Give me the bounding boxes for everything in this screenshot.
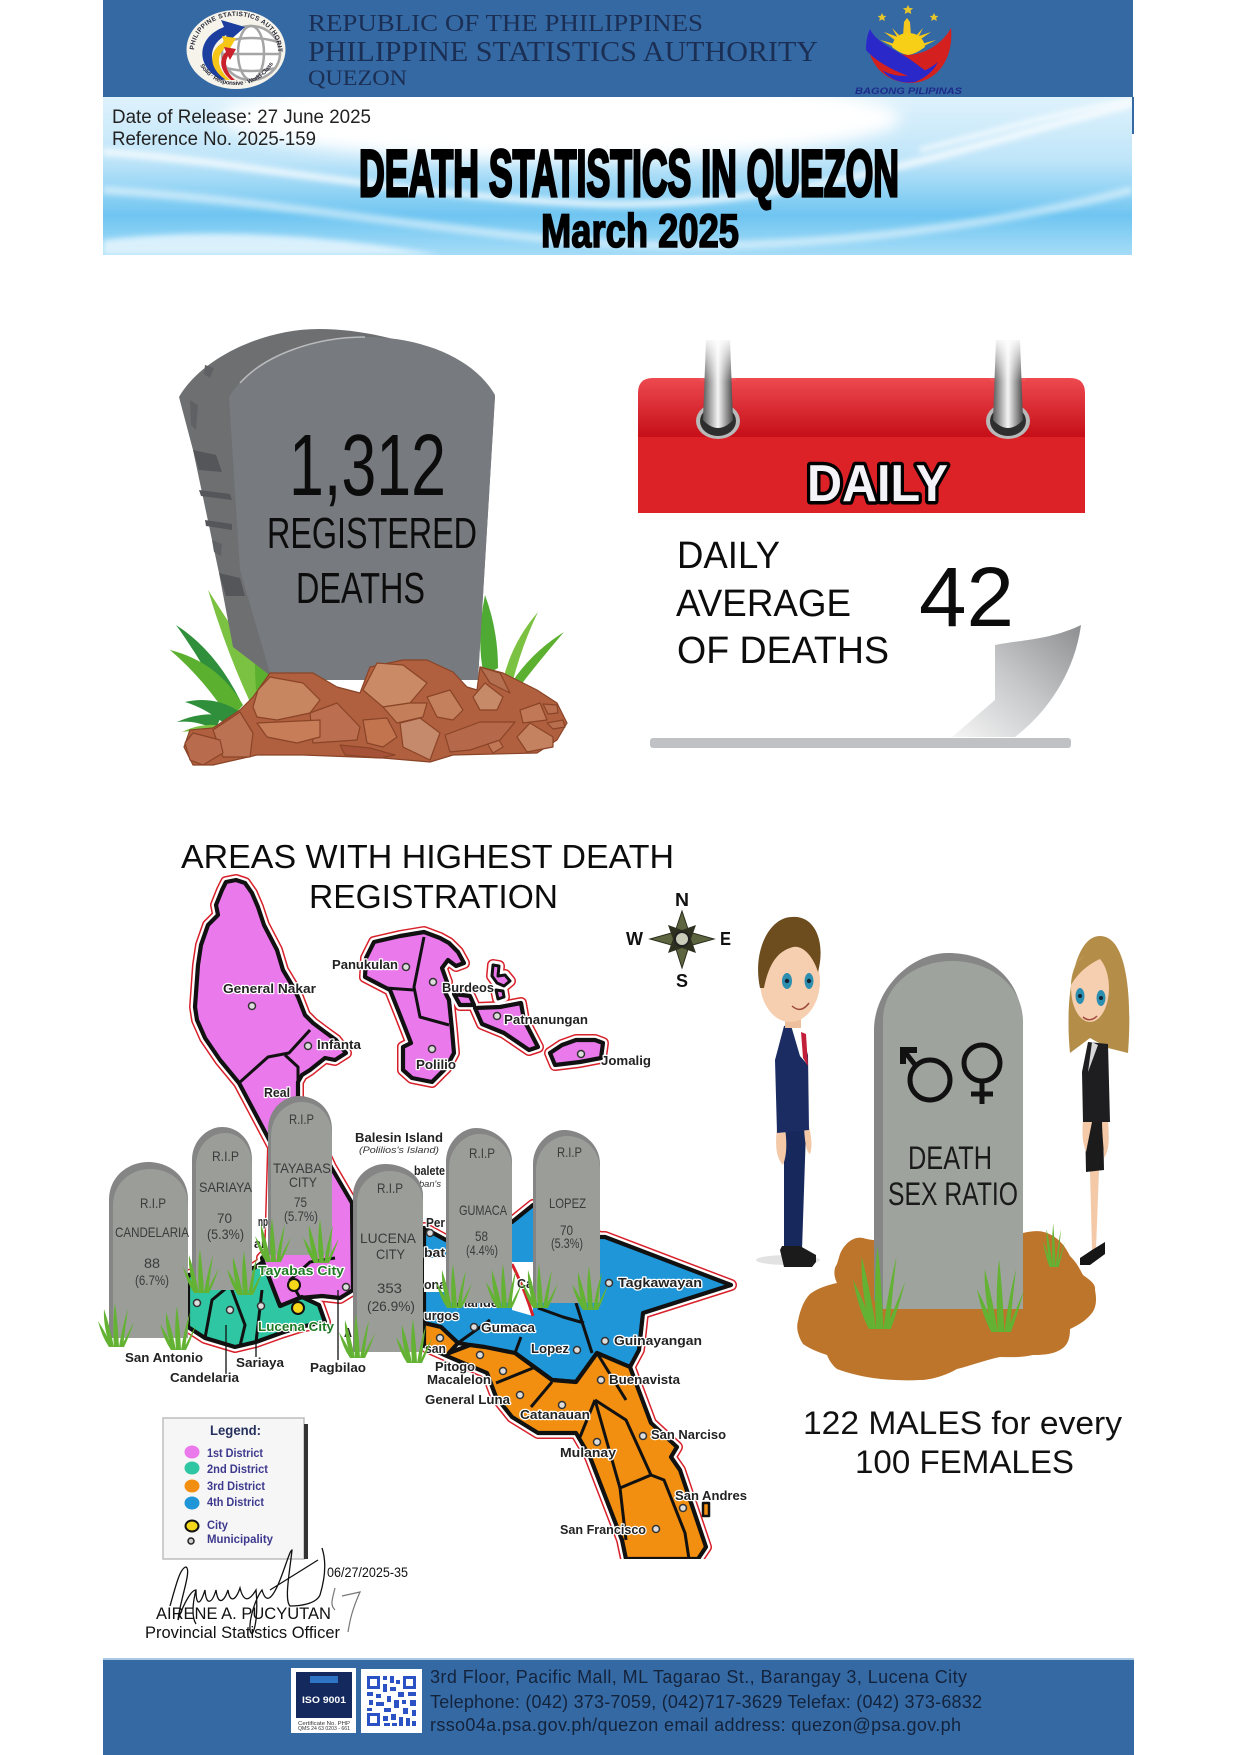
icon: PSA logo: Solid · Responsive · World-Class: [200, 62, 273, 85]
place names: Per: [426, 1216, 445, 1230]
place names: [125, 958, 747, 1537]
calendar label: DAILY: [807, 455, 948, 513]
place names: urgos: [424, 1309, 459, 1323]
icon: Bagong Pilipinas logo: [866, 5, 951, 83]
legend: Municipality: [207, 1534, 274, 1546]
date stamp: 06/27/2025-35: [327, 1565, 408, 1580]
tombstone: Lucena City: (26.9%): [367, 1298, 415, 1314]
tombstone: Lopez: (5.3%): [551, 1235, 583, 1251]
tombstone: Lopez: R.I.P: [557, 1144, 582, 1160]
stone face: [229, 337, 495, 680]
place names: Pagbilao: [310, 1361, 366, 1375]
place names: Jomalig: [601, 1054, 651, 1068]
subtitle: March 2025: [541, 204, 739, 257]
tombstone: Tayabas City: 75: [294, 1194, 307, 1210]
icon: compass: N: [675, 890, 689, 910]
municipal boundaries: [205, 937, 689, 1559]
tombstone: Gumaca: 58: [475, 1228, 488, 1244]
icon: ISO badge: Certificate No. PHP: [298, 1721, 351, 1727]
sex ratio value line 1: 122 MALES for every: [803, 1405, 1122, 1441]
legend: 1st District: [207, 1448, 263, 1460]
contact: web and email: rsso04a.psa.gov.ph/quezon email address: quezon@psa.gov.ph: [430, 1715, 961, 1735]
icon: female symbol: [964, 1045, 1000, 1104]
calendar shadow bar: [650, 738, 1071, 748]
icon: grass tufts: [853, 1223, 1065, 1332]
label: registered: REGISTERED: [267, 509, 477, 558]
label: daily: DAILY: [677, 535, 780, 577]
tombstone: Tayabas City: (5.7%): [284, 1208, 318, 1224]
tombstone: Gumaca: (4.4%): [466, 1242, 498, 1258]
tombstone: Lucena City: 353: [377, 1280, 402, 1296]
place names: Candelaria: [170, 1371, 240, 1385]
tombstone: Tayabas City: TAYABAS: [273, 1160, 331, 1176]
icon: page curl: [952, 625, 1081, 737]
label: deaths: DEATHS: [296, 564, 425, 613]
tombstone: Lopez: LOPEZ: [549, 1195, 586, 1211]
contact: telephone: Telephone: (042) 373-7059, (042)717-3629 Telefax: (042) 373-6832: [430, 1692, 982, 1712]
district outlines: [188, 880, 731, 1559]
label: of deaths: OF DEATHS: [677, 630, 889, 672]
place names: ona: [424, 1278, 447, 1292]
label: death: DEATH: [908, 1140, 992, 1176]
place names: Polilio: [416, 1058, 456, 1072]
place names: Real: [264, 1086, 290, 1100]
place names: ar: [254, 1237, 266, 1251]
icon: compass: [626, 890, 731, 991]
icon: sex ratio tombstone: [874, 953, 1023, 1309]
icon: grass tufts on tombstones: [98, 1218, 608, 1363]
city markers: [288, 1279, 304, 1314]
district 3: [424, 1323, 706, 1559]
place names: General Luna: [425, 1393, 511, 1407]
panel: registered deaths tombstone: [170, 329, 567, 765]
tombstone: Gumaca: GUMACA: [459, 1202, 508, 1218]
legend: [163, 1418, 308, 1559]
release date: Date of Release: 27 June 2025: [112, 107, 371, 128]
tombstone: Sariaya: SARIAYA: [199, 1179, 253, 1195]
legend: 4th District: [207, 1497, 264, 1509]
district 4: [424, 1205, 731, 1382]
icon: dirt mound: [797, 1231, 1096, 1380]
calendar page: [638, 513, 1085, 737]
calendar header: [638, 378, 1085, 437]
place names: bat: [424, 1246, 446, 1260]
icon: calendar ring left: [696, 336, 740, 439]
label: average: AVERAGE: [676, 583, 851, 625]
place names: General Nakar: [223, 982, 316, 996]
small island: [703, 1503, 709, 1516]
icon: grass behind stone: [170, 590, 564, 735]
place names: Sariaya: [236, 1356, 285, 1370]
heading: map: AREAS WITH HIGHEST DEATH: [181, 838, 674, 875]
district 1: [195, 880, 603, 1306]
sex ratio value line 2: 100 FEMALES: [855, 1444, 1074, 1480]
tombstone: Lucena City: LUCENA: [360, 1230, 417, 1246]
tombstone: Sariaya: (5.3%): [207, 1226, 244, 1242]
place names: Panukulan: [332, 958, 398, 972]
islets: [492, 965, 510, 999]
tombstone: Gumaca: R.I.P: [469, 1145, 495, 1161]
district 2: [188, 1262, 325, 1347]
heading: map: [181, 838, 674, 915]
place names: san: [425, 1342, 446, 1356]
tombstone: Candelaria: R.I.P: [140, 1195, 166, 1211]
place names: (Polilios's Island): [359, 1145, 439, 1156]
tombstone: Lucena City: R.I.P: [377, 1180, 403, 1196]
label: sex ratio: SEX RATIO: [888, 1176, 1018, 1212]
header text: authority: PHILIPPINE STATISTICS AUTHORITY: [308, 37, 818, 68]
tombstone: Gumaca: [446, 1128, 512, 1303]
tombstone: Lucena City: CITY: [376, 1246, 406, 1262]
icon: male symbol: [903, 1050, 950, 1100]
header text: province: QUEZON: [308, 65, 407, 90]
tombstone: Candelaria: [109, 1162, 190, 1338]
place names: Lucena City: [258, 1319, 335, 1334]
place names: Lopez: [531, 1342, 569, 1356]
place names: San Andres: [675, 1489, 747, 1503]
tombstone: Lopez: 70: [560, 1222, 573, 1238]
icon: rock pile: [184, 660, 567, 765]
legend: 3rd District: [207, 1481, 265, 1493]
place names: Guinayangan: [614, 1334, 702, 1348]
place names: ban's: [419, 1179, 441, 1190]
panel: sex ratio: [756, 917, 1129, 1480]
icon: signature scribble: [170, 1548, 325, 1634]
officer title: Provincial Statistics Officer: [145, 1624, 340, 1642]
place names: Catanauan: [520, 1408, 590, 1422]
reference number: Reference No. 2025-159: [112, 129, 316, 150]
place names: balete: [414, 1164, 445, 1178]
heading: map: REGISTRATION: [309, 878, 558, 915]
place names: Infanta: [317, 1038, 362, 1052]
icon: initials: [332, 1588, 360, 1632]
tombstone: Sariaya: R.I.P: [212, 1148, 239, 1164]
place names: Mulanay: [560, 1446, 616, 1460]
icon: ISO badge: QMS 24 63 0203 - 661: [298, 1726, 350, 1732]
place names: San Narciso: [651, 1428, 726, 1442]
officer name: AIRENE A. PUCYUTAN: [156, 1605, 331, 1623]
icon: compass: S: [676, 971, 688, 991]
municipality markers: [194, 964, 686, 1532]
place names: Tagkawayan: [618, 1276, 702, 1290]
icon: calendar ring right: [986, 336, 1030, 439]
place names: np: [258, 1215, 268, 1229]
place names: San Francisco: [560, 1523, 646, 1537]
title banner: [103, 97, 1134, 255]
panel: daily average calendar: [638, 336, 1085, 748]
icon: compass: W: [626, 929, 643, 949]
place names: Burdeos: [442, 981, 494, 995]
total count: 1,312: [289, 417, 446, 514]
icon: ISO badge: ISO 9001: [302, 1695, 346, 1705]
place names: San Antonio: [125, 1351, 203, 1365]
place names: A: [344, 1326, 352, 1340]
white pockets: [424, 1258, 533, 1316]
tombstone: Tayabas City: CITY: [289, 1174, 318, 1190]
place names: Flaride: [456, 1296, 498, 1310]
signature block: [145, 1548, 408, 1642]
place names: Ca: [517, 1277, 534, 1291]
stone side: [179, 329, 495, 677]
place names: Tayabas City: [258, 1263, 345, 1278]
header text: republic: REPUBLIC OF THE PHILIPPINES: [308, 11, 703, 37]
logo caption: BAGONG PILIPINAS: [855, 86, 963, 97]
tombstone: Sariaya: 70: [217, 1210, 232, 1226]
icon: PSA logo: [186, 10, 286, 89]
tombstone: Lucena City: [353, 1164, 423, 1352]
daily average value: 42: [919, 550, 1014, 644]
legend: 2nd District: [207, 1464, 268, 1476]
place names: Patnanungan: [504, 1013, 588, 1027]
icon: QR code: [361, 1669, 422, 1733]
place names: Macalelon: [427, 1373, 491, 1387]
place names: Gumaca: [481, 1321, 536, 1335]
tombstone: Candelaria: CANDELARIA: [115, 1224, 190, 1240]
contact: address: 3rd Floor, Pacific Mall, ML Tagarao St., Barangay 3, Lucena City: [430, 1667, 967, 1687]
legend: Legend:: [210, 1423, 261, 1438]
tombstone: Tayabas City: R.I.P: [289, 1111, 314, 1127]
tombstone: Candelaria: (6.7%): [135, 1272, 169, 1288]
tombstone: Tayabas City: [268, 1096, 332, 1255]
map of Quezon: [125, 880, 747, 1559]
icon: compass: E: [720, 929, 731, 949]
header band: [103, 0, 1133, 97]
place names: Pitogo: [435, 1360, 475, 1374]
legend: City: [207, 1520, 229, 1532]
place names: Balesin Island: [355, 1131, 443, 1145]
icon: man: [756, 917, 821, 1267]
tombstone: Lopez: [533, 1130, 600, 1303]
footer band: [103, 1658, 1134, 1755]
icon: ISO badge: [291, 1668, 356, 1733]
tombstone: Candelaria: 88: [144, 1255, 160, 1271]
icon: woman: [1069, 936, 1129, 1265]
tombstone: Sariaya: [192, 1127, 253, 1290]
place names: Buenavista: [609, 1373, 681, 1387]
